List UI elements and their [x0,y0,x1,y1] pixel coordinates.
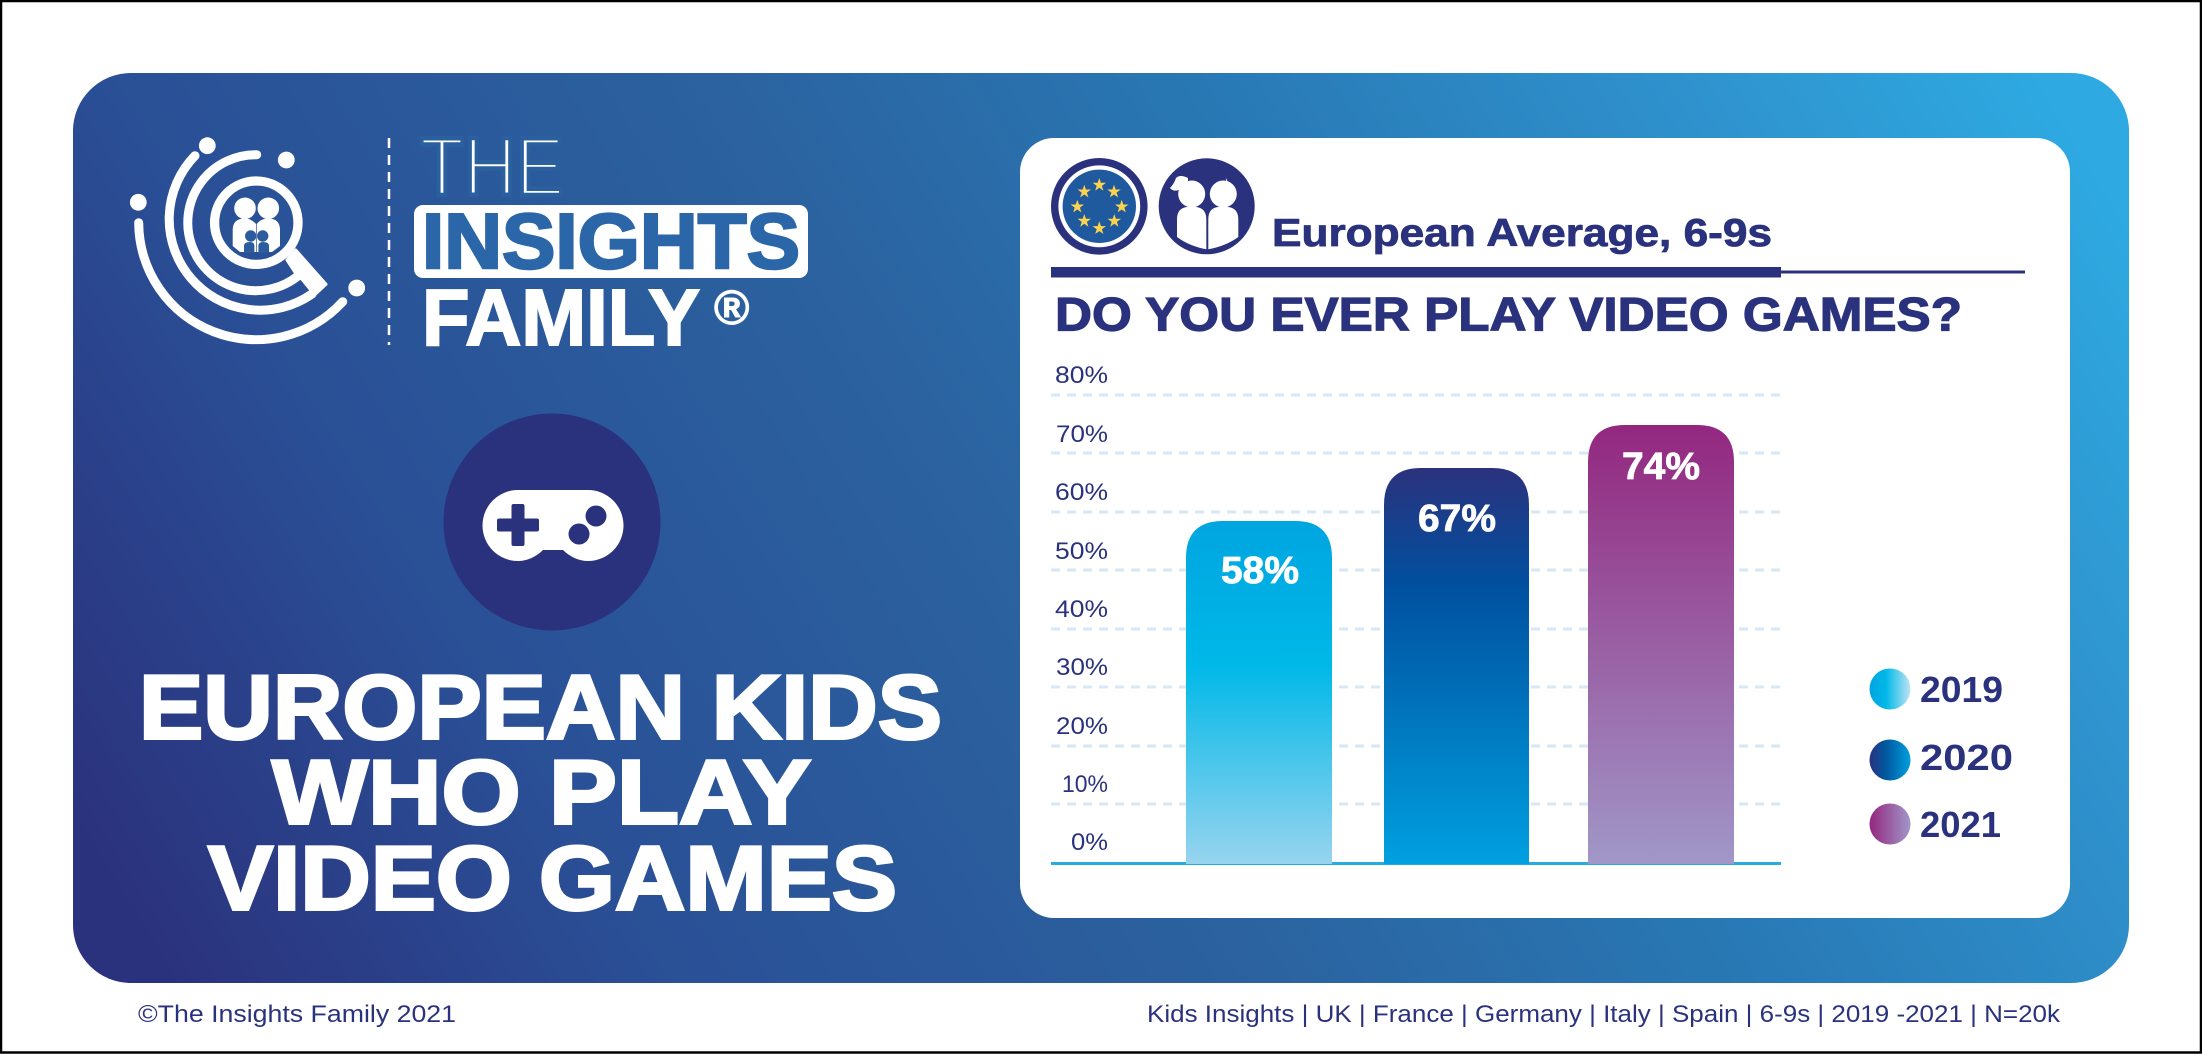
y axis labels: 80% [1055,362,1108,389]
legend [1870,668,2013,845]
icon: EU flag [1055,162,1144,251]
legend item: 2021 [1870,804,2001,845]
logo text: THE: THE [420,120,564,213]
divider rule [1051,267,2025,278]
logo divider [388,138,390,345]
footer: sources: Kids Insights | UK | France | Germany | Italy | Spain | 6-9s | 2019 -2021 | N=20k [1147,1001,2061,1028]
logo registered mark: ® [714,282,749,335]
legend item: 2020 [1870,737,2013,780]
legend item: 2020: 2020 [1920,737,2013,778]
bar: 2021 74% [1588,425,1734,864]
icon: game controller [444,414,660,630]
y axis labels: 30% [1056,654,1108,681]
y axis labels [1055,362,1108,856]
bar: 2020 67%: 67% [1418,498,1496,540]
question heading: DO YOU EVER PLAY VIDEO GAMES? [1055,288,1962,342]
panel: white chart card [1020,138,2070,918]
logo text: FAMILY: FAMILY [422,273,700,362]
chart gridlines [1051,395,1781,804]
x axis [1051,862,1781,865]
footer: copyright: ©The Insights Family 2021 [138,1001,456,1028]
y axis labels: 0% [1071,829,1108,856]
icon: magnifying glass with orbit arcs [130,137,365,340]
y axis labels: 50% [1055,538,1108,565]
bar: 2021 74%: 74% [1622,446,1700,488]
bar: 2019 58% [1186,521,1332,864]
y axis labels: 40% [1055,596,1108,623]
logo: The Insights Family [130,120,808,362]
y axis labels: 70% [1056,421,1108,448]
subtitle: European Average, 6-9s: European Average, 6-9s [1272,212,1772,255]
heading: European kids who play video games: EUROPEAN KIDS [139,658,942,758]
bar: 2019 58%: 58% [1221,550,1299,592]
heading: European kids who play video games [139,658,942,930]
heading: European kids who play video games: WHO PLAY [272,742,811,844]
legend item: 2019 [1870,668,2003,710]
bar: 2020 67% [1384,468,1529,864]
y axis labels: 20% [1056,713,1108,740]
logo box: INSIGHTS: INSIGHTS [422,197,800,285]
legend item: 2021: 2021 [1920,804,2001,845]
y axis labels: 60% [1055,479,1108,506]
y axis labels: 10% [1062,771,1108,798]
bar chart [1051,362,1781,865]
icon: two children [1159,158,1255,254]
legend item: 2019: 2019 [1920,669,2003,710]
heading: European kids who play video games: VIDEO GAMES [208,828,897,930]
